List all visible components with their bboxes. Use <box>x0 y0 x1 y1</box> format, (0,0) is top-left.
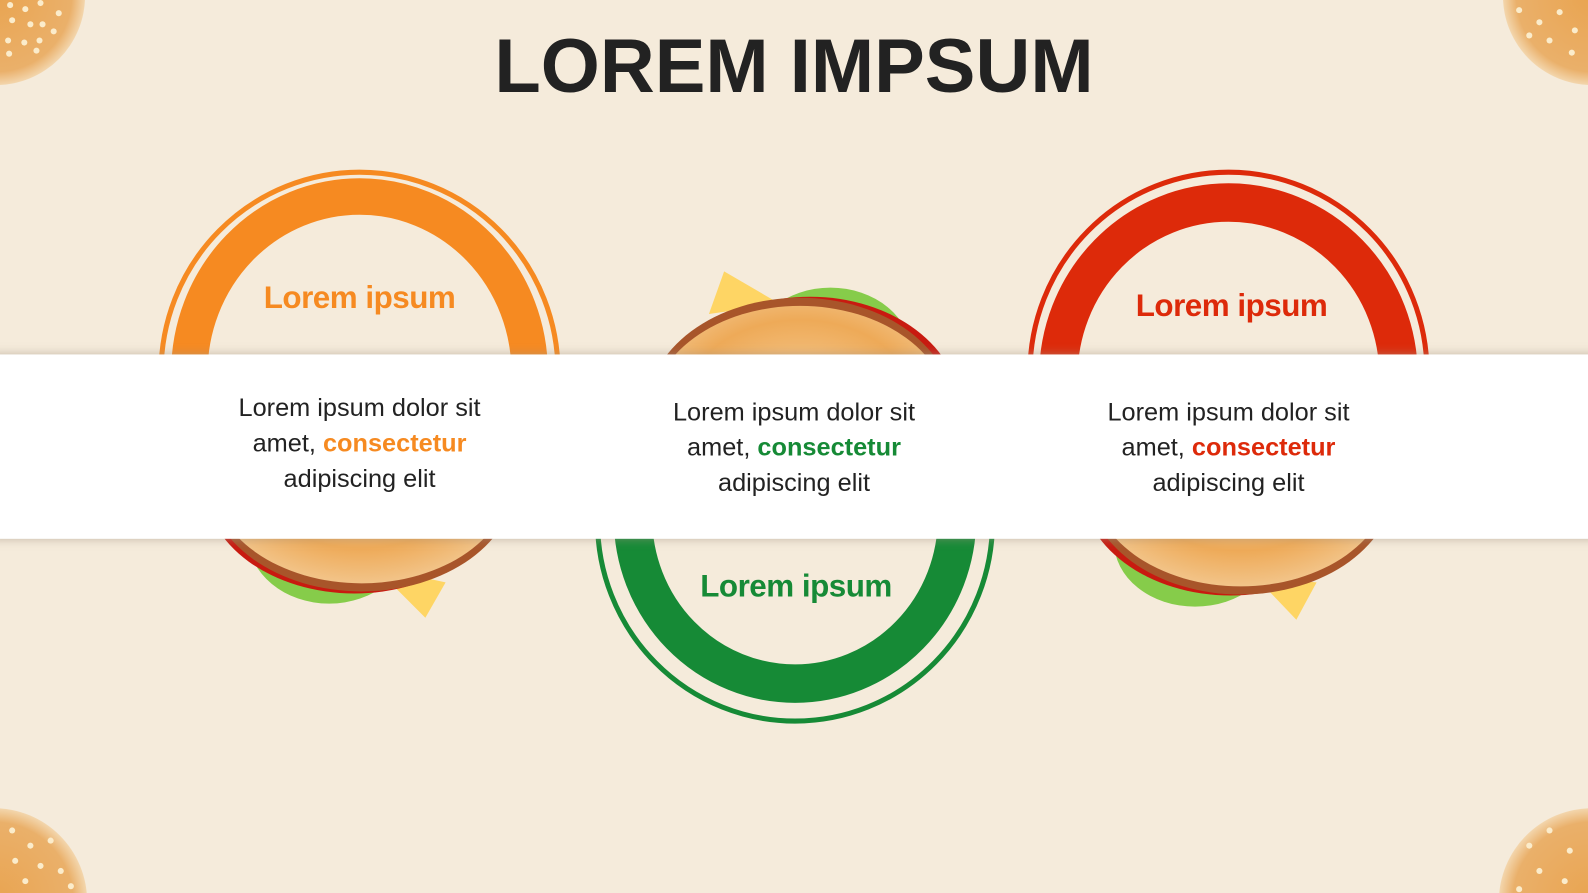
text block: center: adipiscing elit <box>718 469 870 497</box>
title: LOREM IMPSUM <box>494 23 1094 108</box>
text block: center: Lorem ipsum dolor sit <box>673 398 915 426</box>
label: green: Lorem ipsum <box>700 568 892 604</box>
label: orange: Lorem ipsum <box>264 280 455 315</box>
label: red: Lorem ipsum <box>1136 288 1327 323</box>
text block: left: amet, consectetur <box>253 429 466 458</box>
icon: orange ring <box>159 170 560 354</box>
icon: green ring <box>596 538 994 724</box>
icon: red ring <box>1028 170 1429 354</box>
text block: left: adipiscing elit <box>284 465 436 493</box>
text block: left <box>239 394 481 493</box>
text block: left: Lorem ipsum dolor sit <box>239 394 481 422</box>
icon: right burger <box>1081 370 1395 620</box>
text block: right: amet, consectetur <box>1122 433 1335 462</box>
text block: right <box>1107 398 1350 497</box>
icon: left burger <box>205 369 515 618</box>
text block: center: amet, consectetur <box>687 433 901 462</box>
icon: center burger <box>646 271 960 527</box>
text block: right: Lorem ipsum dolor sit <box>1107 398 1349 426</box>
text block: center <box>673 398 915 497</box>
text block: right: adipiscing elit <box>1152 469 1304 497</box>
band <box>0 354 1588 539</box>
